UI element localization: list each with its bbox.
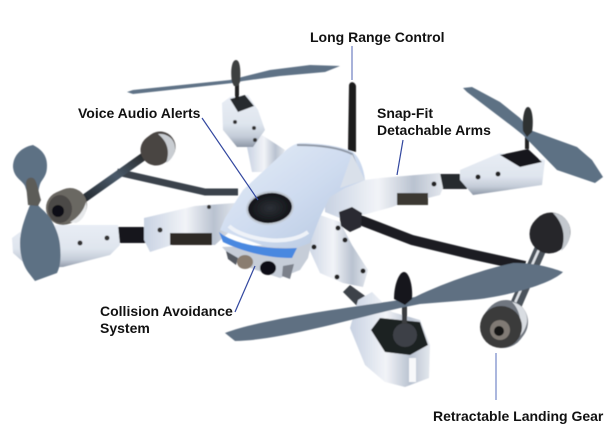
front sensors: [226, 251, 294, 279]
speaker: [244, 189, 296, 227]
right landing gear: [360, 213, 570, 348]
arm: left with propeller: [12, 145, 237, 281]
label: collision avoidance system: System: [100, 320, 150, 336]
leader line: snap-fit arms: [397, 140, 403, 175]
leader line: voice audio alerts: [202, 118, 258, 200]
arm: front with propeller: [225, 215, 563, 387]
arm: rear left with propeller: [127, 60, 340, 172]
label: long range control: Long Range Control: [310, 29, 445, 45]
label: voice audio alerts: Voice Audio Alerts: [78, 105, 201, 121]
leader line: landing gear: [495, 353, 497, 400]
label: snap-fit detachable arms: Detachable Arms: [377, 122, 491, 138]
label: collision avoidance system: Collision Avoidance: [100, 303, 233, 319]
body shell: [220, 143, 365, 278]
rear right connector: [339, 207, 362, 232]
left landing gear: [48, 134, 238, 223]
leader line: long range control: [351, 46, 353, 80]
antenna: [348, 82, 356, 152]
blue light strip: [219, 232, 297, 258]
label: snap-fit detachable arms: Snap-Fit: [377, 105, 433, 121]
leader line: collision avoidance: [235, 266, 255, 312]
arm: right with propeller: [325, 87, 603, 218]
drone illustration: [12, 60, 603, 387]
label: retractable landing gear: Retractable Landing Gear: [433, 408, 604, 424]
